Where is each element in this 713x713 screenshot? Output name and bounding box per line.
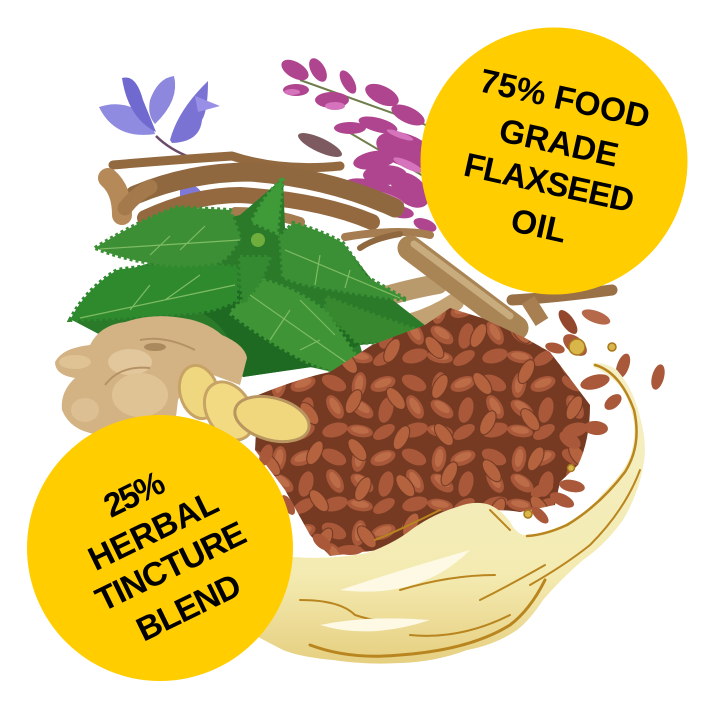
icon: dried roots bbox=[108, 156, 612, 328]
oil splash bbox=[258, 363, 645, 664]
callout: 75% food grade flaxseed oil: GRADE bbox=[496, 112, 622, 175]
icon: ginger slices bbox=[174, 361, 314, 449]
icon: pink flower bbox=[278, 55, 440, 235]
icon: purple flower bbox=[99, 76, 220, 198]
callout: 25% herbal tincture blend: HERBAL bbox=[83, 484, 224, 579]
callout: 25% herbal tincture blend: BLEND bbox=[131, 568, 246, 649]
loose seeds bbox=[257, 306, 667, 555]
callout: 75% food grade flaxseed oil: FLAXSEED bbox=[461, 147, 637, 220]
callout: 75% food grade flaxseed oil bbox=[420, 28, 688, 294]
icon: nettle leaves bbox=[70, 178, 440, 380]
callout: 75% food grade flaxseed oil: OIL bbox=[507, 202, 570, 251]
oil droplets bbox=[524, 339, 616, 518]
callout: 25% herbal tincture blend: 25% bbox=[98, 465, 170, 525]
callout: 25% herbal tincture blend bbox=[27, 415, 293, 681]
icon: ginger root bbox=[55, 316, 247, 435]
callout: 75% food grade flaxseed oil: 75% FOOD bbox=[476, 63, 653, 136]
flaxseed pile bbox=[255, 306, 667, 556]
callout: 25% herbal tincture blend: TINCTURE bbox=[90, 515, 252, 619]
